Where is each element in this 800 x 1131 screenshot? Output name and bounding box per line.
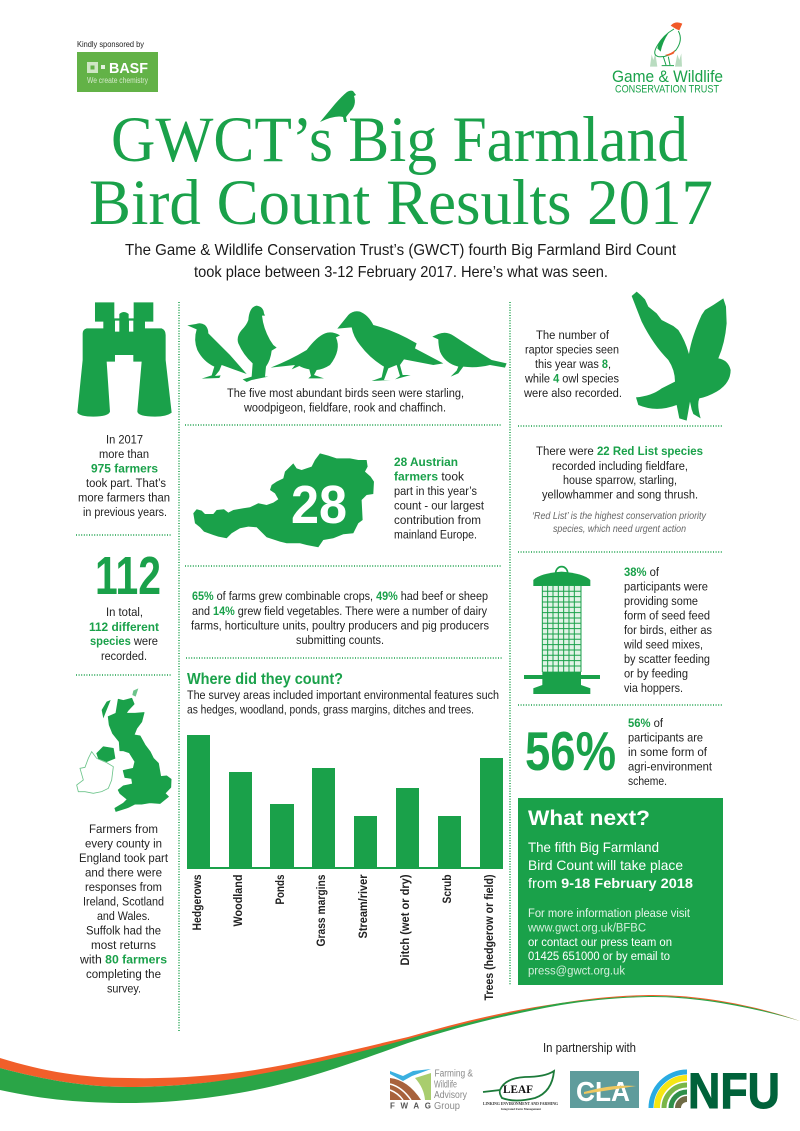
survey description: as hedges, woodland, ponds, grass margins, ditches and trees. [187, 702, 474, 716]
scheme text: in some form of [628, 745, 708, 759]
text block: farm types: submitting counts. [296, 633, 384, 647]
GWCT logo [612, 22, 723, 95]
UK text: completing the [86, 967, 161, 981]
CLA logo: CLA [576, 1076, 630, 1107]
panel: seed feed [524, 565, 712, 695]
Red List text: yellowhammer and song thrush. [542, 488, 698, 502]
Red List footnote [532, 510, 707, 535]
contact details: 01425 651000 or by email to [528, 949, 670, 963]
next count dates [528, 839, 693, 891]
species text: species were [90, 634, 158, 648]
raptor text: this year was 8, [535, 357, 611, 371]
panel: Red List species [532, 444, 707, 535]
CLA logo [570, 1071, 639, 1108]
seed feed text: form of seed feed [624, 608, 710, 622]
intro text: took place between 3-12 February 2017. Here’s what was seen. [194, 264, 608, 281]
title: GWCT’s Big Farmland [111, 104, 688, 176]
raptor text: raptor species seen [525, 342, 619, 356]
bar chart: Woodland [233, 874, 245, 926]
title [89, 104, 713, 239]
UK text: Suffolk had the [86, 924, 161, 938]
title: Bird Count Results 2017 [89, 167, 713, 239]
Austria text: contribution from [394, 513, 481, 527]
Red List footnote: species, which need urgent action [553, 523, 686, 535]
intro text [125, 242, 677, 281]
UK text: most returns [91, 938, 156, 952]
big number 56%: 56% [525, 720, 616, 782]
FWAG logo: Advisory [434, 1090, 467, 1101]
Austria text: count - our largest [394, 498, 484, 512]
contact details [527, 906, 690, 978]
bar chart: Trees (hedgerow or field) [484, 874, 496, 1000]
UK text [79, 822, 168, 996]
logo name: Game & Wildlife [612, 68, 723, 86]
UK text: every county in [85, 836, 162, 850]
raptor text [523, 328, 622, 400]
text block: farm types: and 14% grew field vegetables. There were a number of dairy [192, 604, 488, 618]
seed feed text: or by feeding [624, 666, 688, 680]
BASF logo: BASF [109, 60, 148, 77]
Austria text: 28 Austrian [394, 455, 458, 469]
NFU logo: NFU [688, 1063, 780, 1119]
Austria text: part in this year’s [394, 484, 477, 498]
icon: bird feeder [524, 567, 600, 694]
wave: orange and green swoosh [0, 995, 800, 1103]
UK text: Farmers from [89, 822, 158, 836]
LEAF logo [483, 1071, 558, 1111]
icon: binoculars [77, 302, 172, 417]
seed feed text: participants were [624, 580, 708, 594]
species text: 112 different [89, 620, 159, 634]
farmers text: in previous years. [83, 505, 167, 519]
BASF logo: We create chemistry [87, 76, 148, 85]
panel: raptors and owls [523, 292, 731, 421]
BASF logo [77, 52, 158, 92]
text block: farm types: farms, horticulture units, poultry producers and pig producers [191, 618, 489, 632]
scheme text: 56% of [628, 716, 664, 730]
contact details: For more information please visit [528, 906, 690, 920]
contact details: www.gwct.org.uk/BFBC [527, 920, 646, 934]
panel: Austrian farmers [193, 453, 484, 547]
icon: owl silhouette [632, 292, 731, 421]
icon: bird perched on title [320, 91, 356, 122]
contact details: press@gwct.org.uk [528, 964, 626, 978]
Austria text [394, 455, 484, 542]
panel: what next [518, 798, 723, 985]
LEAF logo: Integrated Farm Management [501, 1107, 542, 1111]
panel background [518, 798, 723, 985]
bar chart: Ponds [275, 874, 287, 904]
Red List footnote: ‘Red List’ is the highest conservation priority [532, 510, 707, 522]
FWAG logo: Group [434, 1101, 460, 1112]
birds text [227, 386, 464, 414]
NFU logo [651, 1063, 780, 1119]
seed feed text: via hoppers. [624, 681, 683, 695]
icon: Austria map with 28 [193, 453, 374, 547]
next count dates: from 9-18 February 2018 [528, 875, 693, 891]
raptor text: The number of [536, 328, 609, 342]
next count dates: The fifth Big Farmland [528, 839, 659, 855]
scheme text: scheme. [628, 774, 667, 788]
farmers text: 975 farmers [91, 462, 158, 476]
bar chart: Stream/river [358, 874, 370, 938]
farmers text: In 2017 [106, 432, 143, 446]
UK text: and Wales. [97, 909, 150, 923]
icon: five bird silhouettes [187, 306, 507, 382]
bar chart: Grass margins [316, 874, 328, 946]
Austria text: mainland Europe. [394, 528, 477, 542]
scheme text: participants are [628, 730, 703, 744]
icon: Austria map with 28: 28 [291, 475, 347, 535]
scheme text [628, 716, 712, 788]
FWAG logo: Farming & [434, 1068, 473, 1080]
farmers text: more than [99, 447, 149, 461]
UK text: and there were [85, 866, 162, 880]
LEAF logo: LEAF [503, 1082, 533, 1096]
sponsor label: Kindly sponsored by [77, 39, 145, 49]
partnership label: In partnership with [543, 1041, 636, 1055]
raptor text: while 4 owl species [524, 372, 619, 386]
panel: where did they count [187, 671, 503, 1000]
farmers text: more farmers than [78, 490, 170, 504]
bar chart: Hedgerows [192, 874, 204, 930]
UK text: England took part [79, 851, 168, 865]
raptor text: were also recorded. [523, 386, 622, 400]
UK text: Ireland, Scotland [83, 894, 164, 908]
seed feed text: providing some [624, 594, 698, 608]
species text [89, 605, 159, 663]
FWAG logo: FWAG [390, 1102, 431, 1110]
bar chart: Ditch (wet or dry) [400, 874, 412, 966]
next count dates: Bird Count will take place [528, 857, 683, 873]
Austria text: farmers took [394, 470, 465, 484]
icon: UK and Ireland map [77, 688, 171, 811]
big number 112: 112 [95, 546, 161, 606]
panel: agri-environment scheme [525, 716, 712, 788]
survey description: The survey areas included important environmental features such [187, 688, 499, 702]
seed feed text [623, 565, 712, 695]
panel: UK coverage [77, 688, 171, 996]
Red List text [536, 444, 703, 502]
farmers text [78, 432, 170, 519]
UK text: survey. [107, 982, 141, 996]
seed feed text: wild seed mixes, [623, 638, 703, 652]
logo subtitle: CONSERVATION TRUST [615, 84, 719, 96]
species text: In total, [106, 605, 143, 619]
FWAG logo: Wildlife [434, 1080, 457, 1090]
survey description [187, 688, 499, 716]
partridge emblem [650, 22, 682, 67]
contact details: or contact our press team on [528, 935, 672, 949]
species text: recorded. [101, 649, 147, 663]
LEAF logo: LINKING ENVIRONMENT AND FARMING [483, 1101, 558, 1106]
scheme text: agri-environment [628, 760, 712, 774]
panel: 112 species [89, 546, 161, 663]
sponsor block [77, 39, 158, 92]
seed feed text: by scatter feeding [624, 652, 710, 666]
panel: farmers taking part [77, 302, 172, 519]
FWAG logo [390, 1068, 473, 1112]
Red List text: recorded including fieldfare, [552, 459, 688, 473]
seed feed text: for birds, either as [624, 623, 712, 637]
intro text: The Game & Wildlife Conservation Trust’s (GWCT) fourth Big Farmland Bird Count [125, 242, 677, 259]
birds text: woodpigeon, fieldfare, rook and chaffinch. [243, 400, 446, 414]
seed feed text: 38% of [624, 565, 660, 579]
panel: five most abundant birds [187, 306, 507, 414]
what next heading: What next? [528, 806, 650, 830]
bar chart: Scrub [442, 874, 454, 904]
farmers text: took part. That’s [86, 476, 166, 490]
Red List text: house sparrow, starling, [563, 473, 677, 487]
UK text: with 80 farmers [79, 952, 167, 966]
UK text: responses from [85, 880, 162, 894]
bar chart [187, 735, 503, 1000]
text block: farm types [191, 589, 489, 647]
text block: farm types: 65% of farms grew combinable crops, 49% had beef or sheep [192, 589, 488, 603]
heading: Where did they count? [187, 671, 343, 688]
Red List text: There were 22 Red List species [536, 444, 703, 458]
birds text: The five most abundant birds seen were starling, [227, 386, 464, 400]
